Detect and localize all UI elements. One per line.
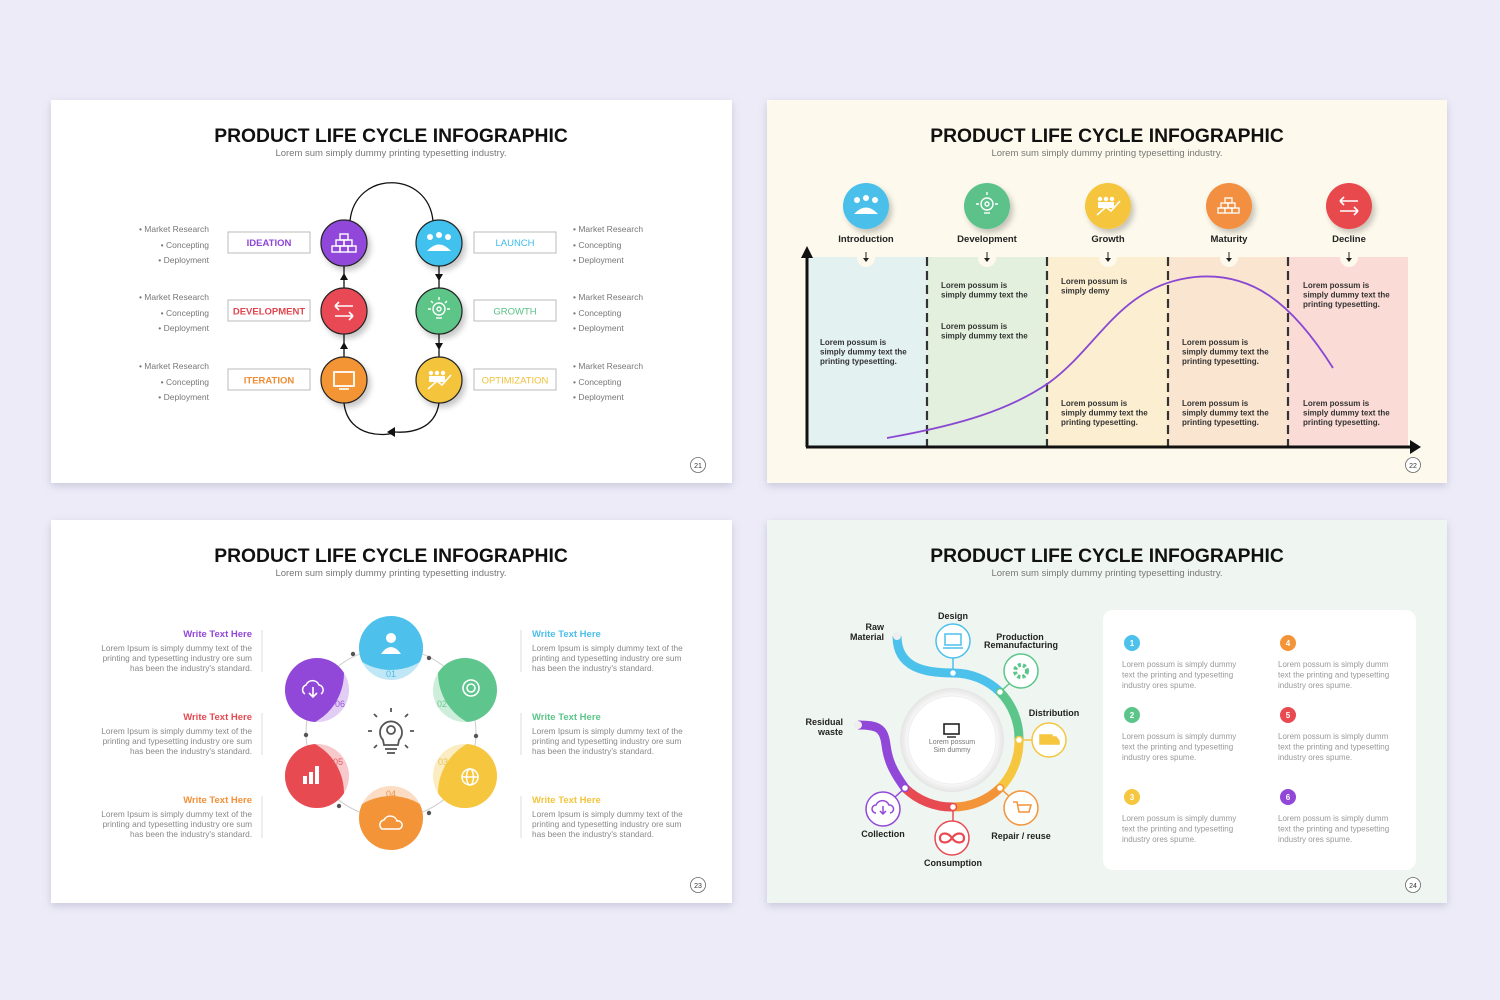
cycle labels: Raw [865, 622, 885, 632]
text blocks right: Write Text Here [532, 795, 601, 806]
cycle labels: waste [817, 727, 843, 737]
numbered card: text the printing and typesetting [1122, 824, 1233, 834]
item 05 [285, 744, 349, 808]
item 01 [359, 616, 423, 680]
stage texts [820, 277, 1390, 427]
numbered card: 1 [1130, 639, 1135, 648]
stage texts: Lorem possum is [941, 281, 1008, 290]
text blocks left: has been the industry's standard. [130, 829, 252, 839]
bullet lists: • Market Research [139, 292, 209, 302]
item 01: 01 [386, 669, 396, 679]
bullet lists: • Deployment [158, 323, 210, 333]
bullet lists: • Market Research [573, 224, 643, 234]
item 02: 02 [437, 699, 447, 709]
text blocks right: Write Text Here [532, 629, 601, 640]
numbered card: text the printing and typesetting [1122, 670, 1233, 680]
cycle labels: Consumption [924, 858, 982, 868]
center circle: Lorem possum [929, 739, 975, 746]
bullet lists: • Deployment [573, 392, 624, 402]
cycle labels: Repair / reuse [991, 831, 1051, 841]
page number: 21 [694, 463, 702, 470]
numbered card: Lorem possum is simply dumm [1278, 732, 1389, 741]
stage texts: Lorem possum is [1061, 277, 1128, 286]
text blocks left [101, 629, 252, 839]
text blocks left: has been the industry's standard. [130, 663, 252, 673]
numbered card: industry ores spume. [1278, 681, 1352, 690]
text blocks right: has been the industry's standard. [532, 746, 654, 756]
stage labels: Growth [1091, 234, 1125, 245]
numbered card: Lorem possum is simply dumm [1278, 814, 1389, 823]
numbered card: 5 [1286, 711, 1291, 720]
circle: growth [416, 288, 462, 334]
numbered card: industry ores spume. [1122, 681, 1196, 690]
circle: development [321, 288, 367, 334]
item 06 [285, 658, 349, 722]
text blocks right: printing and typesetting industry ore sum [532, 653, 682, 663]
title: PRODUCT LIFE CYCLE INFOGRAPHIC [214, 126, 568, 147]
stage texts: simply dummy text the [941, 290, 1028, 300]
label boxes: IDEATION [247, 238, 291, 249]
cycle labels: Distribution [1029, 708, 1079, 718]
item 03: 03 [438, 757, 448, 767]
text blocks left: has been the industry's standard. [130, 746, 252, 756]
item 04: 04 [386, 789, 396, 799]
subtitle: Lorem sum simply dummy printing typesetting industry. [991, 148, 1223, 159]
bullet lists: • Deployment [158, 255, 210, 265]
bullet lists: • Concepting [573, 308, 622, 318]
numbered card: text the printing and typesetting [1278, 742, 1389, 752]
cycle labels: Production [996, 632, 1044, 642]
stage texts: Lorem possum is [820, 338, 887, 347]
label boxes [228, 232, 556, 390]
numbered card: text the printing and typesetting [1278, 670, 1389, 680]
panel: circular economy slide 24 [767, 520, 1447, 903]
bullet lists [139, 224, 643, 402]
numbered card: text the printing and typesetting [1122, 742, 1233, 752]
numbered card: 6 [1286, 793, 1291, 802]
label boxes: GROWTH [493, 306, 537, 318]
item 06: 06 [335, 699, 345, 709]
cycle labels: Remanufacturing [984, 640, 1058, 650]
stage labels: Development [957, 234, 1018, 245]
circle: optimization [416, 357, 462, 403]
numbered card: Lorem possum is simply dummy [1122, 732, 1236, 741]
text blocks left: Write Text Here [183, 712, 252, 723]
panel: hexagon cycle slide 23 [51, 520, 732, 908]
stage texts: Lorem possum is [1303, 281, 1370, 290]
bullet lists: • Concepting [161, 308, 209, 318]
numbered card [1103, 610, 1416, 870]
circle: ideation [321, 220, 367, 266]
bullet lists: • Market Research [139, 361, 209, 371]
stage labels [838, 234, 1366, 245]
label boxes: DEVELOPMENT [233, 306, 305, 318]
loop arrows [344, 183, 439, 434]
circle: iteration [321, 357, 367, 403]
numbered card: industry ores spume. [1122, 835, 1196, 844]
stage texts: simply dummy text the [1303, 408, 1390, 418]
stage texts: simply dummy text the [941, 332, 1028, 340]
stage labels: Introduction [838, 234, 894, 245]
text blocks left: Lorem Ipsum is simply dummy text of the [101, 809, 252, 819]
text blocks left: printing and typesetting industry ore sum [103, 819, 252, 829]
text blocks right: has been the industry's standard. [532, 663, 654, 673]
stage texts: simply dummy text the [1182, 348, 1269, 356]
cycle arcs [858, 636, 1019, 807]
label boxes: OPTIMIZATION [482, 376, 549, 386]
stage texts: Lorem possum is [1061, 399, 1128, 408]
cycle labels: Design [938, 611, 968, 621]
numbered card: Lorem possum is simply dummy [1122, 814, 1236, 823]
stage texts: Lorem possum is [1182, 338, 1249, 347]
circle: launch [416, 220, 462, 266]
bullet lists: • Market Research [573, 361, 643, 371]
bullet lists: • Deployment [573, 323, 624, 333]
stage labels: Maturity [1211, 234, 1248, 245]
stage texts: printing typesetting. [1061, 418, 1138, 427]
text blocks left: printing and typesetting industry ore sum [103, 736, 252, 746]
stage texts: Lorem possum is [1182, 399, 1249, 408]
text blocks left: Lorem Ipsum is simply dummy text of the [101, 726, 252, 736]
bullet lists: • Concepting [573, 377, 622, 387]
title: PRODUCT LIFE CYCLE INFOGRAPHIC [214, 546, 568, 567]
down arrows [863, 252, 1352, 262]
bullet lists: • Deployment [158, 392, 210, 402]
page number: 23 [694, 883, 702, 890]
title: PRODUCT LIFE CYCLE INFOGRAPHIC [930, 546, 1284, 567]
numbered card: 3 [1130, 793, 1135, 802]
panel: cycle diagram slide 21 [51, 100, 732, 483]
stage texts: Lorem possum is [941, 322, 1008, 331]
stage texts: printing typesetting. [1182, 357, 1259, 366]
page number [1406, 878, 1420, 892]
life cycle curve [887, 276, 1333, 438]
icon: center bulb [368, 708, 414, 753]
page number: 22 [1409, 463, 1417, 470]
item 02 [433, 658, 497, 722]
page number [690, 878, 706, 892]
bullet lists: • Concepting [161, 377, 209, 387]
numbered card: Lorem possum is simply dummy [1122, 660, 1236, 669]
stage texts: simply dummy text the [1061, 408, 1148, 418]
cycle labels: Residual [805, 717, 843, 727]
text blocks right: Lorem Ipsum is simply dummy text of the [532, 643, 683, 653]
text blocks left: Write Text Here [183, 795, 252, 806]
text blocks right: printing and typesetting industry ore sum [532, 736, 682, 746]
item 04 [359, 786, 423, 850]
stage texts: printing typesetting. [820, 357, 897, 366]
text blocks right: printing and typesetting industry ore sum [532, 819, 682, 829]
page number [1406, 458, 1420, 472]
item 05: 05 [333, 757, 343, 767]
connector ring [306, 648, 476, 818]
label boxes: LAUNCH [495, 238, 535, 249]
text blocks left: Lorem Ipsum is simply dummy text of the [101, 643, 252, 653]
stage columns [807, 249, 1408, 447]
cycle labels [805, 611, 1079, 868]
cycle labels: Collection [861, 829, 905, 839]
stage texts: simply dummy text the [1303, 290, 1390, 300]
numbered card: 4 [1286, 639, 1291, 648]
stage texts: printing typesetting. [1182, 418, 1259, 427]
bullet lists: • Market Research [573, 292, 643, 302]
bullet lists: • Concepting [573, 240, 622, 250]
text blocks right: Write Text Here [532, 712, 601, 723]
item 03 [433, 744, 497, 808]
stage labels: Decline [1332, 234, 1366, 245]
stage texts: simply dummy text the [820, 348, 907, 356]
center circle [900, 688, 1004, 792]
axes [806, 255, 1412, 447]
text blocks left: Write Text Here [183, 629, 252, 640]
cycle labels: Material [850, 632, 884, 642]
stage texts: printing typesetting. [1303, 300, 1380, 309]
text blocks right: has been the industry's standard. [532, 829, 654, 839]
bullet lists: • Deployment [573, 255, 624, 265]
stage icons [843, 183, 1372, 229]
stage texts: printing typesetting. [1303, 418, 1380, 427]
stage texts: simply demy [1061, 286, 1110, 296]
subtitle: Lorem sum simply dummy printing typesetting industry. [991, 568, 1223, 579]
text blocks right: Lorem Ipsum is simply dummy text of the [532, 809, 683, 819]
numbered card: text the printing and typesetting [1278, 824, 1389, 834]
numbered card: 2 [1130, 711, 1135, 720]
stage texts: simply dummy text the [1182, 408, 1269, 418]
text blocks left: printing and typesetting industry ore sum [103, 653, 252, 663]
label boxes: ITERATION [244, 376, 294, 386]
subtitle: Lorem sum simply dummy printing typesetting industry. [275, 148, 507, 159]
text blocks right: Lorem Ipsum is simply dummy text of the [532, 726, 683, 736]
nodes and icons [866, 624, 1066, 855]
page number [690, 458, 706, 472]
text blocks right [532, 629, 683, 839]
numbered card: industry ores spume. [1122, 753, 1196, 762]
page number: 24 [1409, 883, 1417, 890]
panel: stage chart slide 22 [767, 100, 1447, 483]
numbered card: industry ores spume. [1278, 835, 1352, 844]
bullet lists: • Concepting [161, 240, 209, 250]
bullet lists: • Market Research [139, 224, 209, 234]
stage texts: Lorem possum is [1303, 399, 1370, 408]
title: PRODUCT LIFE CYCLE INFOGRAPHIC [930, 126, 1284, 147]
numbered card: Lorem possum is simply dumm [1278, 660, 1389, 669]
numbered card: industry ores spume. [1278, 753, 1352, 762]
subtitle: Lorem sum simply dummy printing typesetting industry. [275, 568, 507, 579]
center circle: Sim dummy [934, 747, 971, 754]
